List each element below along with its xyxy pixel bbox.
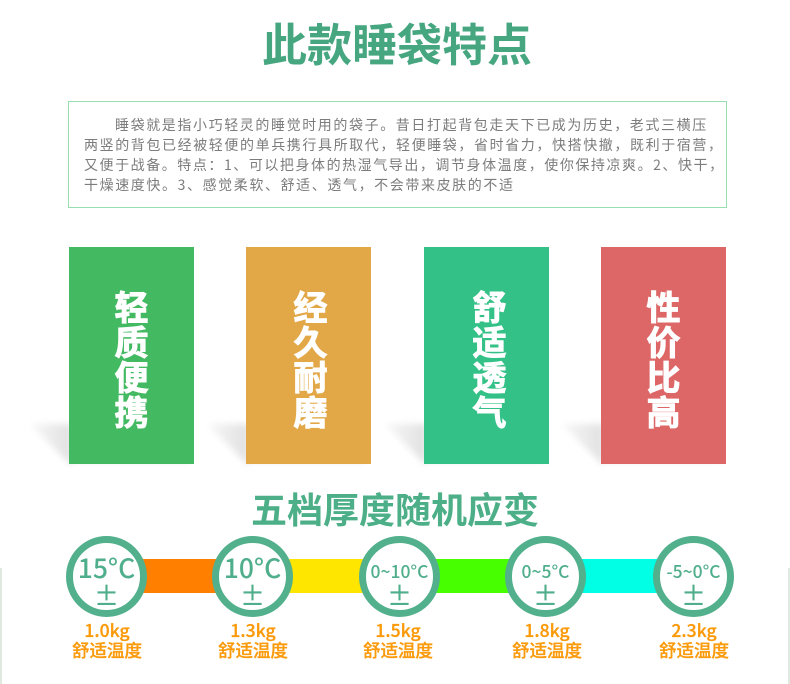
card: 经久耐磨: 经 bbox=[294, 281, 328, 330]
label: 1.5kg bbox=[363, 618, 433, 663]
card: 舒适透气: 舒 bbox=[472, 281, 506, 330]
card: 轻质便携: 便 bbox=[114, 351, 148, 400]
label: 1.8kg: 1.8kg bbox=[524, 618, 570, 643]
card: 性价比高: 比 bbox=[646, 351, 680, 400]
label: 1.8kg bbox=[512, 618, 582, 663]
circle: -5~0°C bbox=[653, 536, 734, 617]
card: 性价比高: 性 bbox=[646, 281, 680, 330]
card: 舒适透气: 适 bbox=[472, 316, 506, 365]
card: 性价比高: 高 bbox=[646, 386, 680, 435]
circle: 15°C: ± bbox=[94, 577, 119, 613]
card: 经久耐磨: 磨 bbox=[294, 386, 328, 435]
circle: 0~10°C bbox=[359, 536, 440, 617]
card: 轻质便携 bbox=[69, 247, 194, 464]
label: 2.3kg bbox=[659, 618, 729, 663]
circle: 0~5°C: 0~5°C bbox=[522, 559, 569, 584]
connector bar: orange bbox=[140, 559, 220, 593]
circle: 15°C bbox=[66, 536, 147, 617]
circle: -5~0°C: -5~0°C bbox=[666, 559, 721, 584]
label: 2.3kg: 2.3kg bbox=[671, 618, 717, 643]
label: 1.5kg: 舒适温度 bbox=[363, 638, 433, 663]
label: 1.3kg: 1.3kg bbox=[230, 618, 276, 643]
panel: introduction text bbox=[68, 101, 727, 208]
circle: 0~5°C bbox=[505, 536, 586, 617]
circle: 10°C: 10°C bbox=[224, 547, 281, 586]
label: 1.0kg: 1.0kg bbox=[84, 618, 130, 643]
label: 1.0kg bbox=[72, 618, 142, 663]
card: 轻质便携: 携 bbox=[114, 386, 148, 435]
card: 轻质便携: 质 bbox=[114, 316, 148, 365]
card: 性价比高: 价 bbox=[646, 316, 680, 365]
label: 1.3kg: 舒适温度 bbox=[218, 638, 288, 663]
panel: introduction text: 两竖的背包已经被轻便的单兵携行具所取代，轻便睡袋，省时省力，快搭快撤，既利于宿营， bbox=[84, 135, 724, 155]
connector bar: yellow bbox=[285, 559, 365, 593]
circle: 0~10°C: 0~10°C bbox=[371, 559, 428, 584]
label: 1.8kg: 舒适温度 bbox=[512, 638, 582, 663]
panel: introduction text: 睡袋就是指小巧轻灵的睡觉时用的袋子。昔日打起背包走天下已成为历史，老式三横压 bbox=[115, 115, 708, 135]
circle: 0~10°C: ± bbox=[387, 577, 412, 613]
circle: 10°C bbox=[212, 536, 293, 617]
section heading: 五档厚度随机应变 bbox=[251, 482, 539, 534]
card: 舒适透气: 气 bbox=[472, 386, 506, 435]
card: 经久耐磨: 久 bbox=[294, 316, 328, 365]
label: 1.0kg: 舒适温度 bbox=[72, 638, 142, 663]
title: 此款睡袋特点 bbox=[262, 9, 532, 74]
label: 1.5kg: 1.5kg bbox=[375, 618, 421, 643]
card: 轻质便携: 轻 bbox=[114, 281, 148, 330]
circle: 15°C: 15°C bbox=[78, 547, 135, 586]
connector bar: cyan bbox=[578, 559, 658, 593]
card: 舒适透气: 透 bbox=[472, 351, 506, 400]
panel: introduction text: 干燥速度快。3、感觉柔软、舒适、透气，不会带来皮肤的不适 bbox=[84, 175, 515, 195]
circle: 10°C: ± bbox=[240, 577, 265, 613]
card: 舒适透气 bbox=[424, 247, 549, 464]
label: 2.3kg: 舒适温度 bbox=[659, 638, 729, 663]
circle: 0~5°C: ± bbox=[533, 577, 558, 613]
panel: introduction text: 又便于战备。特点：1、可以把身体的热湿气导出，调节身体温度，使你保持凉爽。2、快干， bbox=[84, 155, 725, 175]
circle: -5~0°C: ± bbox=[681, 577, 706, 613]
card: 经久耐磨: 耐 bbox=[294, 351, 328, 400]
card: 性价比高 bbox=[601, 247, 726, 464]
label: 1.3kg bbox=[218, 618, 288, 663]
card: 经久耐磨 bbox=[246, 247, 371, 464]
connector bar: green bbox=[432, 559, 512, 593]
